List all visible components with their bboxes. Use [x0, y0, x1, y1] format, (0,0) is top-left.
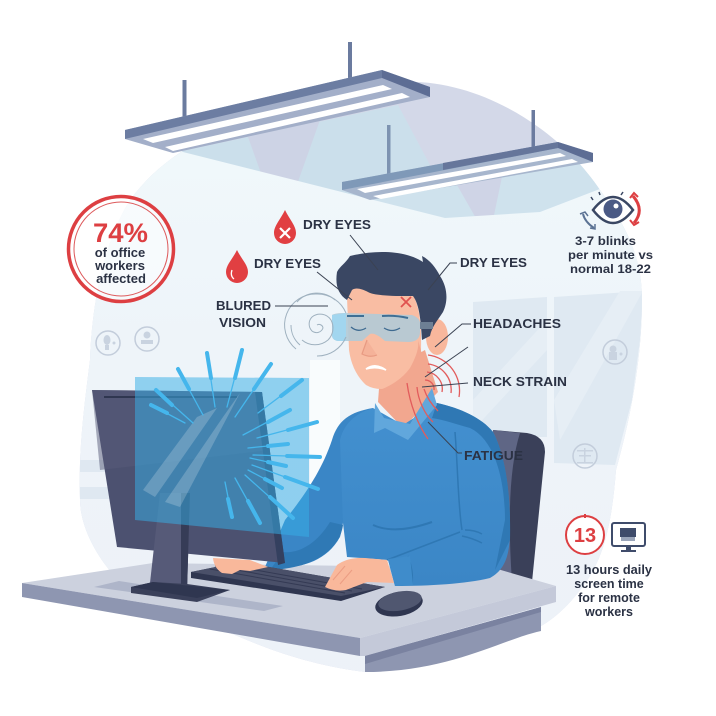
stat: 74% of office workers: affected	[96, 271, 146, 286]
window panels	[473, 291, 643, 465]
chair	[490, 430, 545, 582]
stat: 74% of office workers: 74%	[93, 218, 148, 248]
light rays	[151, 350, 320, 523]
stat: 13 hours screen time: screen time	[574, 577, 644, 591]
label: neck strain: NECK STRAIN	[473, 374, 567, 389]
icon: eye	[580, 192, 639, 229]
person	[191, 252, 510, 601]
neck	[378, 350, 438, 428]
stat: 74% of office workers: of office	[95, 245, 145, 260]
label: dry eyes left: DRY EYES	[254, 256, 321, 271]
face	[347, 285, 421, 389]
leader lines	[275, 235, 471, 453]
label: blurred vision: VISION	[219, 315, 266, 330]
label: dry eyes right: DRY EYES	[460, 255, 527, 270]
stat: blinks with eye icon: per minute vs	[568, 248, 653, 262]
stat: blinks with eye icon: normal 18-22	[570, 262, 651, 276]
stat: 74% of office workers: workers	[94, 258, 145, 273]
keyboard	[191, 562, 385, 601]
stat: 13 hours screen time: for remote	[578, 591, 640, 605]
stat: blinks with eye icon	[568, 192, 653, 276]
icon: clock 13: 13	[574, 525, 596, 547]
label: blurred vision: BLURED	[216, 298, 271, 313]
hands	[213, 558, 394, 591]
icon: drop	[226, 250, 248, 283]
goggles	[332, 313, 433, 342]
collar	[374, 388, 437, 440]
label: dry eyes top: DRY EYES	[303, 217, 371, 232]
nose and mouth	[362, 340, 377, 356]
blue light overlay	[135, 350, 320, 537]
stat: 74% of office workers	[68, 196, 174, 302]
mouse	[373, 588, 425, 620]
ceiling lamp 1	[125, 42, 430, 153]
stat: blinks with eye icon: 3-7 blinks	[575, 234, 636, 248]
ear	[426, 319, 448, 355]
monitor	[92, 390, 285, 602]
label: fatigue: FATIGUE	[464, 448, 523, 463]
stat: 13 hours screen time: workers	[584, 605, 633, 619]
stat: 13 hours screen time: 13 hours daily	[566, 563, 652, 577]
blurred vision spiral	[285, 293, 346, 356]
stat: 13 hours screen time	[566, 514, 652, 619]
red x mark	[401, 297, 411, 307]
icon: monitor	[612, 523, 645, 552]
icon: drop with x	[274, 210, 296, 244]
sweater arm behind monitor	[265, 408, 373, 568]
monitor stand	[131, 493, 230, 602]
neck strain arcs	[407, 355, 460, 439]
cuff	[388, 556, 413, 586]
ceiling lamp 2	[342, 110, 593, 200]
label: headaches: HEADACHES	[473, 316, 561, 331]
small background icons	[96, 327, 627, 468]
desk	[22, 563, 556, 672]
hair	[336, 252, 446, 340]
sweater torso and right arm	[340, 403, 510, 586]
background blob	[80, 82, 642, 672]
